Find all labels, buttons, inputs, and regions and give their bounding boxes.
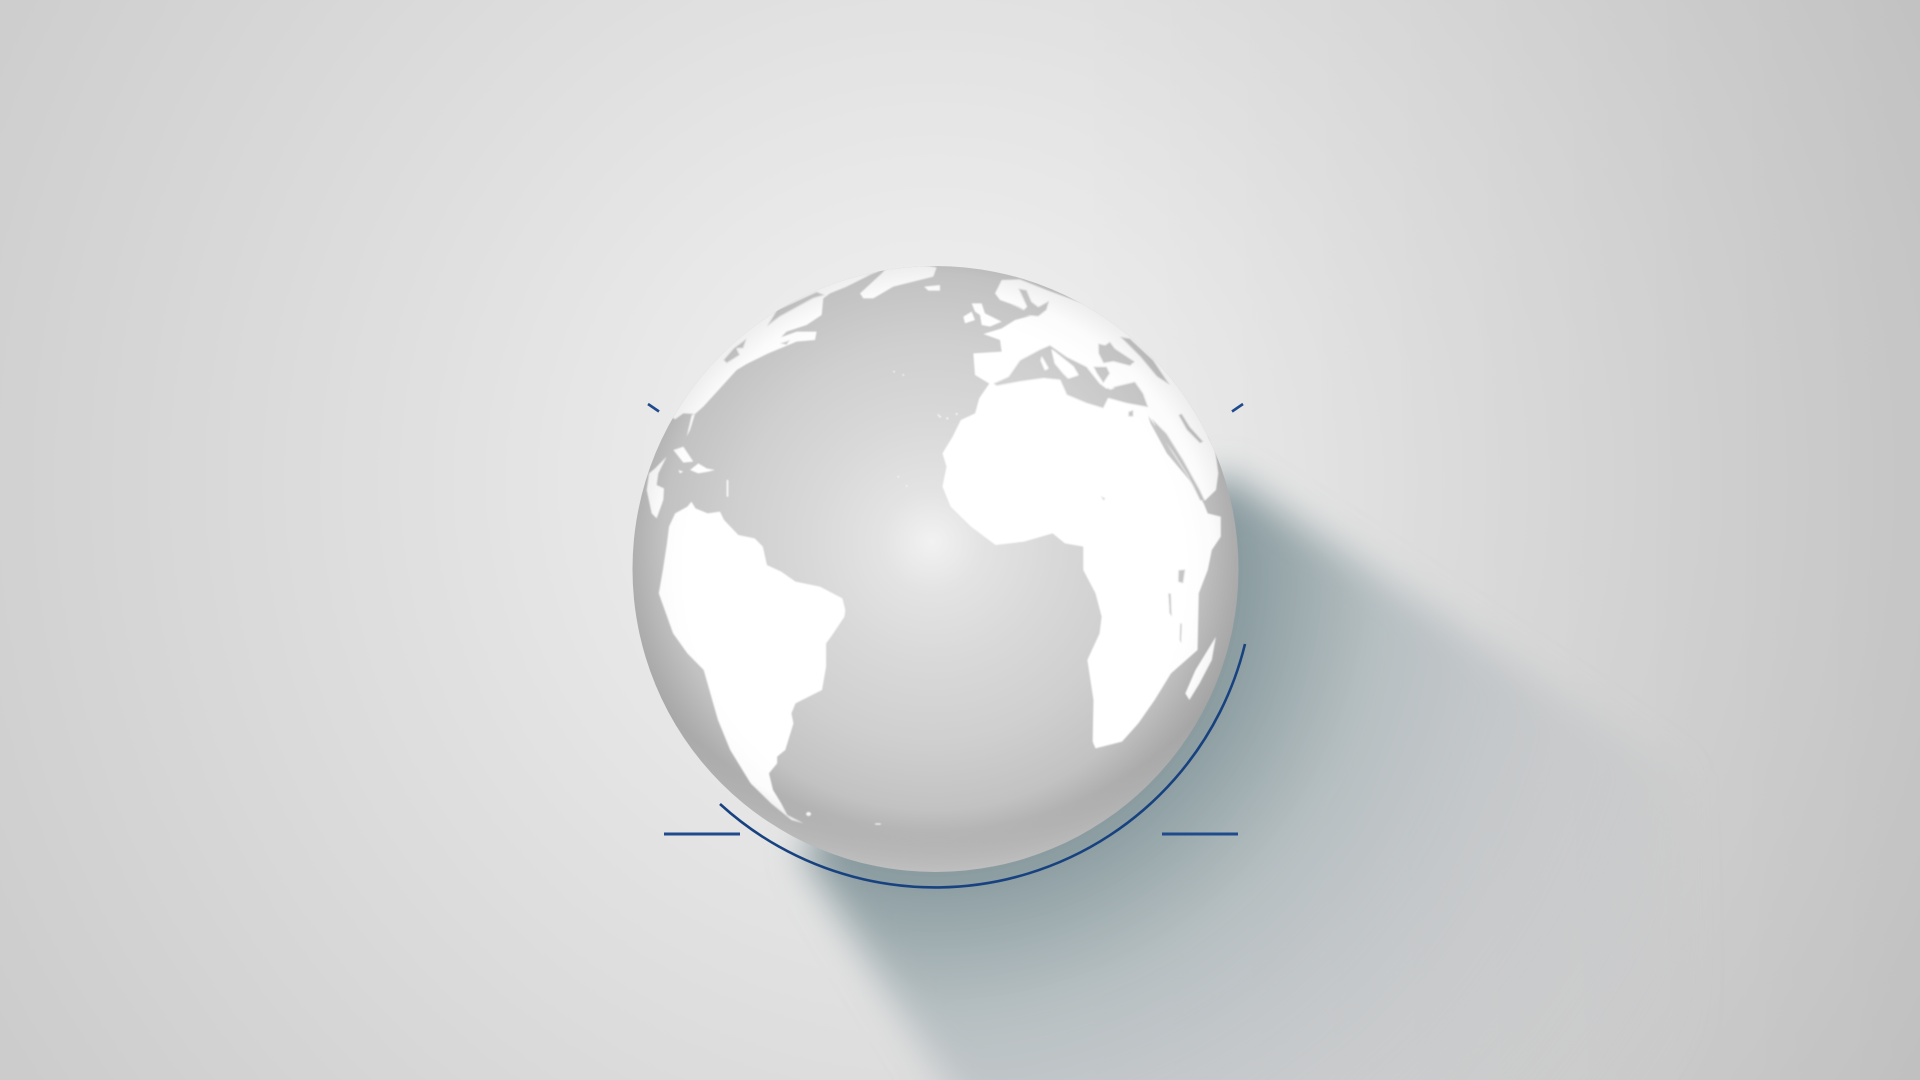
right tick mark (1232, 404, 1243, 412)
blue arc around globe (720, 644, 1245, 887)
globe sphere (632, 266, 1238, 872)
left horizontal accent line (664, 832, 740, 836)
left tick mark (648, 404, 659, 412)
long cast shadow of the globe (800, 472, 1700, 1080)
right horizontal accent line (1162, 832, 1238, 836)
continents (646, 266, 1222, 826)
globe (632, 266, 1238, 872)
globe lower rim light (632, 266, 1238, 872)
